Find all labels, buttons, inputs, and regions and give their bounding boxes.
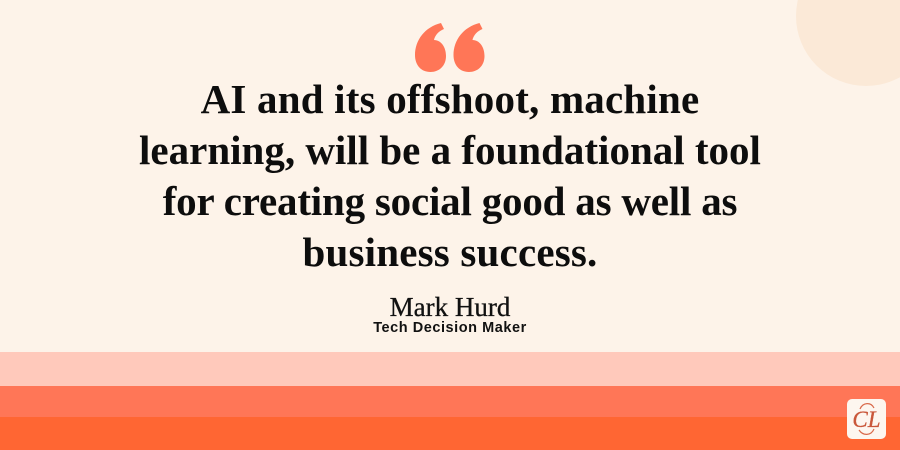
middle stripe bbox=[0, 386, 900, 417]
footer stripes bbox=[0, 352, 900, 450]
author name: Mark Hurd bbox=[390, 292, 510, 322]
quote text bbox=[139, 76, 761, 275]
bottom stripe bbox=[0, 417, 900, 450]
quote text: for creating social good as well as bbox=[163, 178, 737, 224]
logo monogram: CL bbox=[852, 407, 881, 432]
logo badge bbox=[847, 399, 886, 439]
quote text: business success. bbox=[302, 229, 598, 275]
light stripe bbox=[0, 352, 900, 386]
quote text: learning, will be a foundational tool bbox=[139, 127, 761, 173]
decorative corner circle bbox=[796, 0, 900, 86]
author title: Tech Decision Maker bbox=[373, 320, 527, 336]
quote text: AI and its offshoot, machine bbox=[201, 76, 699, 122]
icon: quotation mark bbox=[415, 23, 484, 72]
